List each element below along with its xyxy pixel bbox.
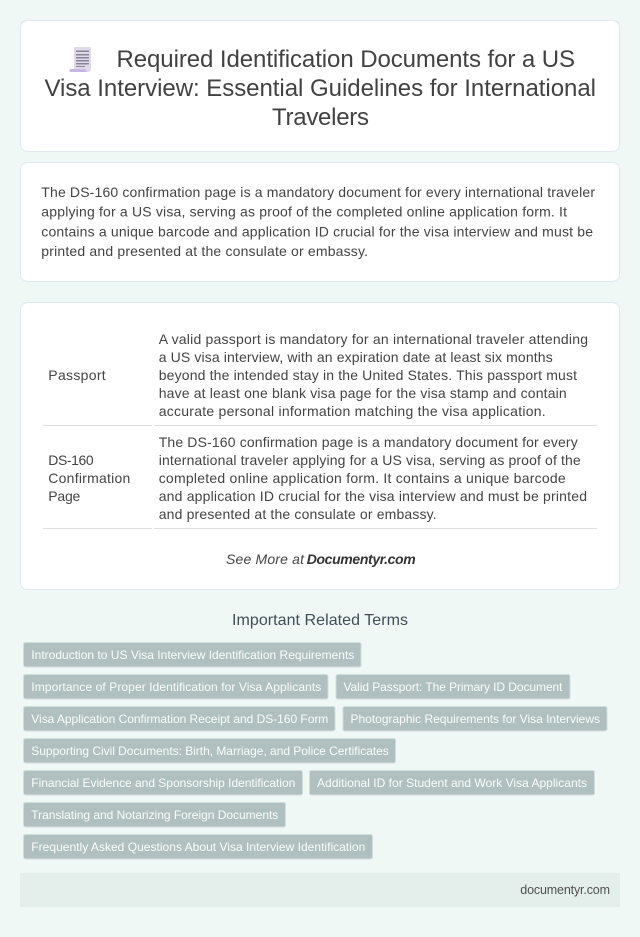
tag [24, 674, 328, 699]
tag: Supporting Civil Documents: Birth, Marriage, and Police Certificates [31, 744, 389, 758]
title: Travelers [272, 104, 369, 131]
panel: documents table [20, 302, 620, 590]
tag [343, 706, 607, 731]
row label: DS-160 confirmation page: Page [48, 488, 81, 504]
panel: related term tags [24, 642, 607, 859]
see more link: Documentyr.com [307, 551, 416, 567]
tag [24, 642, 361, 667]
tag [310, 770, 594, 795]
row text: DS-160 description: international traveler applying for a US visa, serving as proof of the [159, 452, 581, 468]
panel: title card [20, 20, 620, 152]
row label: passport: Passport [48, 367, 106, 383]
row text: DS-160 description: completed online application form. It contains a unique barcode [159, 470, 566, 486]
tag [24, 706, 335, 731]
row text: passport description: accurate personal information matching the visa application. [159, 403, 546, 419]
row text: DS-160 description: and application ID crucial for the visa interview and must be printed [159, 488, 587, 504]
row label: DS-160 confirmation page: DS-160 [48, 452, 94, 468]
text block: description paragraph: applying for a US visa, serving as proof of the completed online application form. It [41, 204, 567, 220]
tag: Valid Passport: The Primary ID Document [344, 680, 563, 694]
tag [24, 738, 396, 763]
text block: description paragraph: printed and presented at the consulate or embassy. [41, 243, 368, 259]
tag: Financial Evidence and Sponsorship Identification [31, 776, 295, 790]
tag: Photographic Requirements for Visa Interviews [350, 712, 600, 726]
tag [24, 770, 302, 795]
row text: DS-160 description [159, 434, 587, 522]
text block: description paragraph [41, 184, 595, 259]
see more link [226, 551, 416, 567]
panel: description [20, 162, 620, 282]
text block: description paragraph: contains a unique barcode and application ID crucial for the visa interview and must be [41, 224, 593, 240]
row label: DS-160 confirmation page: Confirmation [48, 470, 130, 486]
see more link: See More at [226, 551, 305, 567]
row text: DS-160 description: and presented at the consulate or embassy. [159, 506, 437, 522]
tag: Visa Application Confirmation Receipt and DS-160 Form [31, 712, 328, 726]
tag: Importance of Proper Identification for Visa Applicants [31, 680, 321, 694]
title [44, 46, 596, 131]
row text: passport description: beyond the intended stay in the United States. This passport must [159, 367, 577, 383]
row label: DS-160 confirmation page [48, 452, 130, 504]
footer [20, 873, 620, 907]
table row: passport [48, 331, 588, 419]
tag [24, 834, 372, 859]
tag [336, 674, 570, 699]
title: Visa Interview: Essential Guidelines for International [44, 75, 596, 102]
text block: description paragraph: The DS-160 confirmation page is a mandatory document for every international traveler [41, 184, 595, 200]
icon: receipt document [70, 47, 91, 72]
row text: DS-160 description: The DS-160 confirmation page is a mandatory document for every [159, 434, 578, 450]
tag: Frequently Asked Questions About Visa Interview Identification [31, 840, 365, 854]
row text: passport description [159, 331, 588, 419]
heading: important related terms: Important Related Terms [232, 612, 408, 629]
footer text: documentyr.com [520, 883, 610, 897]
title: Required Identification Documents for a US [116, 46, 575, 73]
tag: Translating and Notarizing Foreign Documents [31, 808, 278, 822]
tag: Additional ID for Student and Work Visa Applicants [317, 776, 587, 790]
row text: passport description: have at least one blank visa page for the visa stamp and contain [159, 385, 567, 401]
table row: DS-160 confirmation page [48, 434, 587, 522]
row text: passport description: a US visa interview, with an expiration date at least six months [159, 349, 553, 365]
tag: Introduction to US Visa Interview Identification Requirements [31, 648, 354, 662]
tag [24, 802, 286, 827]
row text: passport description: A valid passport is mandatory for an international traveler attending [159, 331, 588, 347]
